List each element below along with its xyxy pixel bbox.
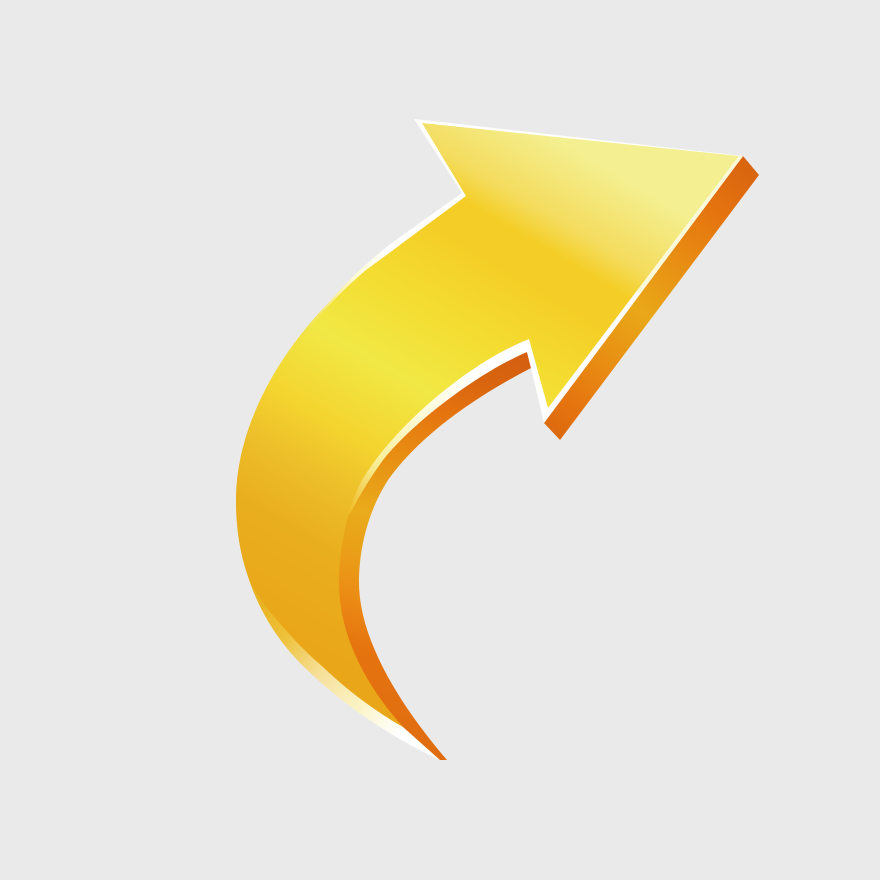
arrow upper-left edge highlight [290, 237, 400, 352]
arrow inner curve white strip [340, 339, 529, 514]
arrow top face [236, 123, 739, 727]
arrow lower edge highlight and white wedge [236, 500, 440, 760]
arrow head right edge highlight [637, 156, 743, 294]
arrow underside band [320, 352, 531, 760]
white outline of arrow head [380, 119, 743, 423]
arrow head side face [544, 156, 759, 440]
